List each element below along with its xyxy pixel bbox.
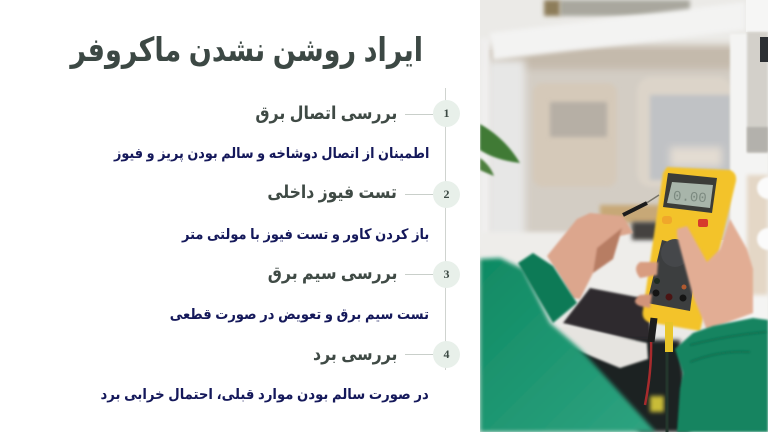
multimeter reading: 0.00 <box>672 189 707 207</box>
step 2 number <box>433 181 460 208</box>
step 3 number <box>433 261 460 288</box>
step 3 heading: بررسی سیم برق <box>267 263 397 283</box>
step 1 <box>113 103 429 162</box>
step 4 number <box>433 341 460 368</box>
step 2 heading: تست فیوز داخلی <box>267 182 397 202</box>
step 2 number: 2 <box>444 187 450 201</box>
step 2 <box>181 182 429 243</box>
step 1 heading: بررسی اتصال برق <box>255 103 397 123</box>
step 3 description: تست سیم برق و تعویض در صورت قطعی <box>170 307 429 323</box>
step 1 description: اطمینان از اتصال دوشاخه و سالم بودن پریز و فیوز <box>114 146 429 162</box>
title: ایراد روشن نشدن ماکروفر <box>70 31 423 68</box>
step 1 number <box>433 100 460 127</box>
step 1 connector <box>405 114 433 115</box>
step 2 description: باز کردن کاور و تست فیوز با مولتی متر <box>182 227 429 243</box>
right hand <box>635 219 753 330</box>
step 3 number: 3 <box>444 267 450 281</box>
left hand <box>547 213 633 299</box>
test leads <box>623 195 669 432</box>
timeline spine <box>445 88 446 370</box>
step 4 <box>101 344 429 403</box>
plant <box>480 124 520 176</box>
step 4 description: در صورت سالم بودن موارد قبلی، احتمال خرابی برد <box>101 387 429 403</box>
step 4 connector <box>405 354 433 355</box>
step 4 number: 4 <box>444 347 450 361</box>
step 3 connector <box>405 274 433 275</box>
green sleeves <box>480 253 768 432</box>
microwave background <box>480 0 768 432</box>
photo: hands testing a microwave with a yellow multimeter <box>480 0 768 432</box>
multimeter <box>643 167 736 331</box>
step 3 <box>170 263 429 323</box>
step 1 number: 1 <box>444 106 450 120</box>
step 4 heading: بررسی برد <box>313 344 397 364</box>
step 2 connector <box>405 194 433 195</box>
